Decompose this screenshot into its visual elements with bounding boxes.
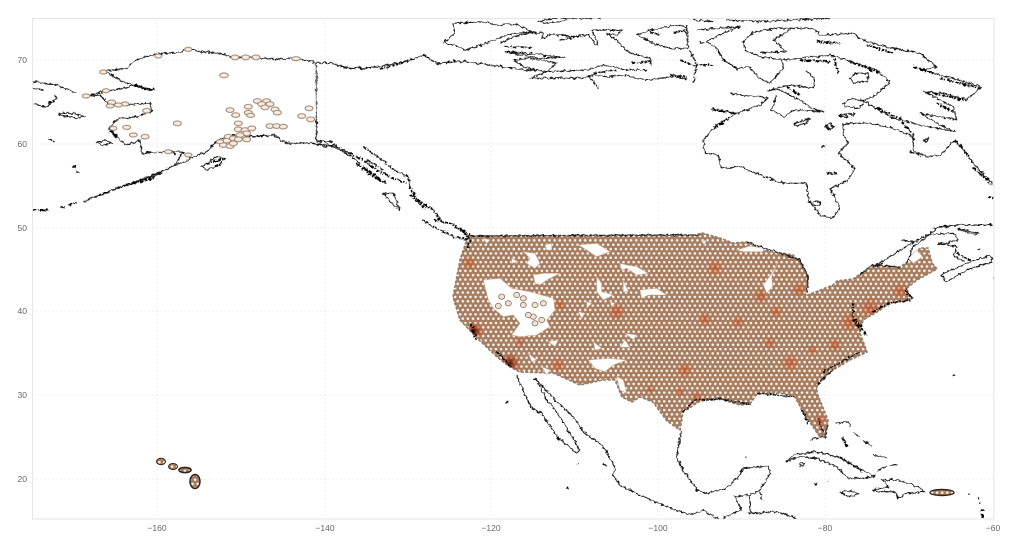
coastline: St Lawrence, Maritimes and Newfoundland (873, 225, 994, 376)
x axis labels: −60 (986, 523, 1000, 533)
y axis labels: 20 (18, 474, 27, 484)
y axis labels: 70 (18, 55, 27, 65)
x axis labels (147, 523, 1000, 533)
y axis labels: 50 (18, 223, 27, 233)
unpopulated gaps in the western US (483, 238, 667, 393)
x axis labels: −100 (648, 523, 668, 533)
coastline: US dark shorelines (462, 230, 912, 440)
isolated hexbins inside western gap (495, 292, 546, 326)
x axis labels: −80 (818, 523, 832, 533)
y axis labels: 40 (18, 306, 27, 316)
hexbin layer: Puerto Rico (930, 490, 954, 496)
hexbin layer: Hawaii (156, 458, 200, 488)
x axis labels: −140 (315, 523, 335, 533)
hexbin layer: contiguous United States (453, 233, 937, 437)
y axis labels: 30 (18, 390, 27, 400)
coastline: Mexico, Central America, Caribbean (505, 375, 984, 520)
y axis labels: 60 (18, 139, 27, 149)
coastline: Alaska and Chukotka (33, 48, 360, 210)
coastline: arctic Canada west (340, 18, 688, 88)
x axis labels: −160 (147, 523, 167, 533)
coastline: Hudson Bay and eastern arctic (680, 18, 993, 228)
Great Lakes and northern gaps (702, 240, 923, 293)
coastline: southeast Alaska and British Columbia (300, 120, 470, 240)
y axis labels (18, 55, 27, 484)
x axis labels: −120 (481, 523, 501, 533)
hexbin layer: Alaska (82, 47, 315, 157)
population hot spots (461, 255, 909, 427)
